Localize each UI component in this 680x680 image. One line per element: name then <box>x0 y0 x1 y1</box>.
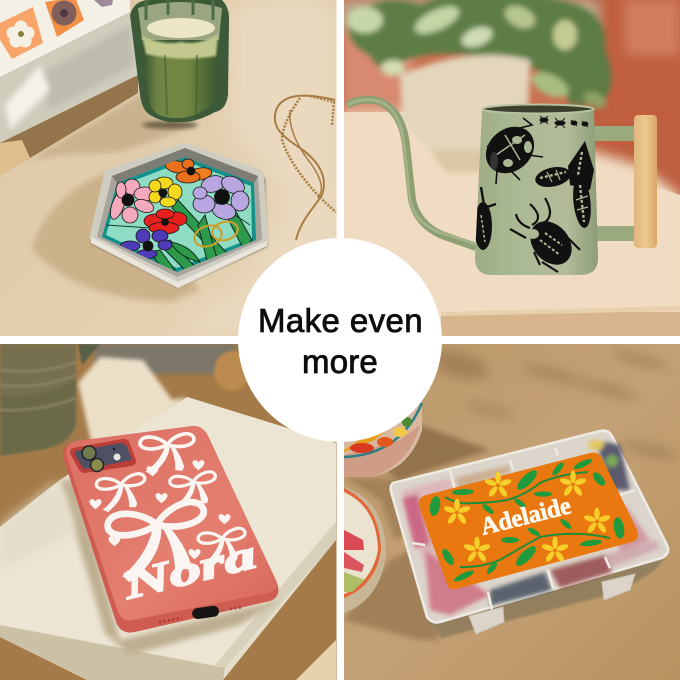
candy bowl top <box>344 400 422 477</box>
charging port and speaker holes <box>159 605 243 622</box>
paper behind <box>78 357 187 450</box>
box clasps <box>469 574 635 634</box>
art tile: purple flower <box>45 0 84 37</box>
candy compartments <box>402 440 660 615</box>
bug: ladybird <box>486 118 544 184</box>
can spout <box>347 100 476 247</box>
name: Nora: Nora <box>118 531 260 608</box>
art tile: partial flower <box>94 0 113 7</box>
ceramic mug <box>0 344 100 456</box>
flower: yellow <box>149 177 182 207</box>
pink phone case <box>63 426 278 633</box>
blurred terracotta wall <box>340 0 680 210</box>
bug: stag beetle <box>510 198 580 273</box>
white hearts <box>89 460 231 582</box>
bug: ants <box>540 116 588 128</box>
orange name label <box>419 453 638 589</box>
panel: jewellery tray photo <box>0 0 337 336</box>
vine decoration lower <box>440 508 626 583</box>
flower: red <box>144 209 187 234</box>
potted plant <box>347 0 611 172</box>
watering can <box>347 100 657 275</box>
flower: purple <box>120 229 172 258</box>
vine decoration upper <box>428 457 607 525</box>
open notebook <box>0 397 336 680</box>
candle shadow <box>142 121 198 129</box>
table shadows <box>344 425 490 640</box>
panel: watering can photo <box>340 0 680 336</box>
centre white circle with headline <box>238 238 442 442</box>
can body <box>475 108 598 275</box>
candy bowl bottom <box>344 487 386 613</box>
gold rings <box>193 220 239 248</box>
name: Adelaide: Adelaide <box>478 492 574 541</box>
green glass candle <box>130 0 229 122</box>
compartment dividers <box>412 448 635 610</box>
headline text: more <box>302 343 378 380</box>
gold necklace <box>275 96 336 240</box>
plastic craft box <box>391 431 669 638</box>
white ribbon bows <box>96 433 249 584</box>
acrylic frame with card <box>0 0 138 175</box>
flower: lavender <box>193 173 249 222</box>
wood grain shadows <box>428 346 680 463</box>
panel: phone case photo <box>0 344 337 680</box>
panel: candy box photo <box>344 344 680 680</box>
flower: pink <box>110 178 154 224</box>
camera bump <box>70 439 136 473</box>
table top <box>344 112 680 336</box>
bug: moth <box>533 141 594 229</box>
wooden coaster <box>214 351 250 391</box>
wooden handle <box>634 115 657 248</box>
hexagon flower tray <box>91 144 267 288</box>
flower: orange <box>164 159 213 183</box>
can handle arms <box>594 126 634 241</box>
dark backdrop <box>95 344 235 374</box>
bug: small moth <box>474 187 496 250</box>
headline text: Make even <box>258 302 423 339</box>
art tile: white flower <box>0 7 43 59</box>
